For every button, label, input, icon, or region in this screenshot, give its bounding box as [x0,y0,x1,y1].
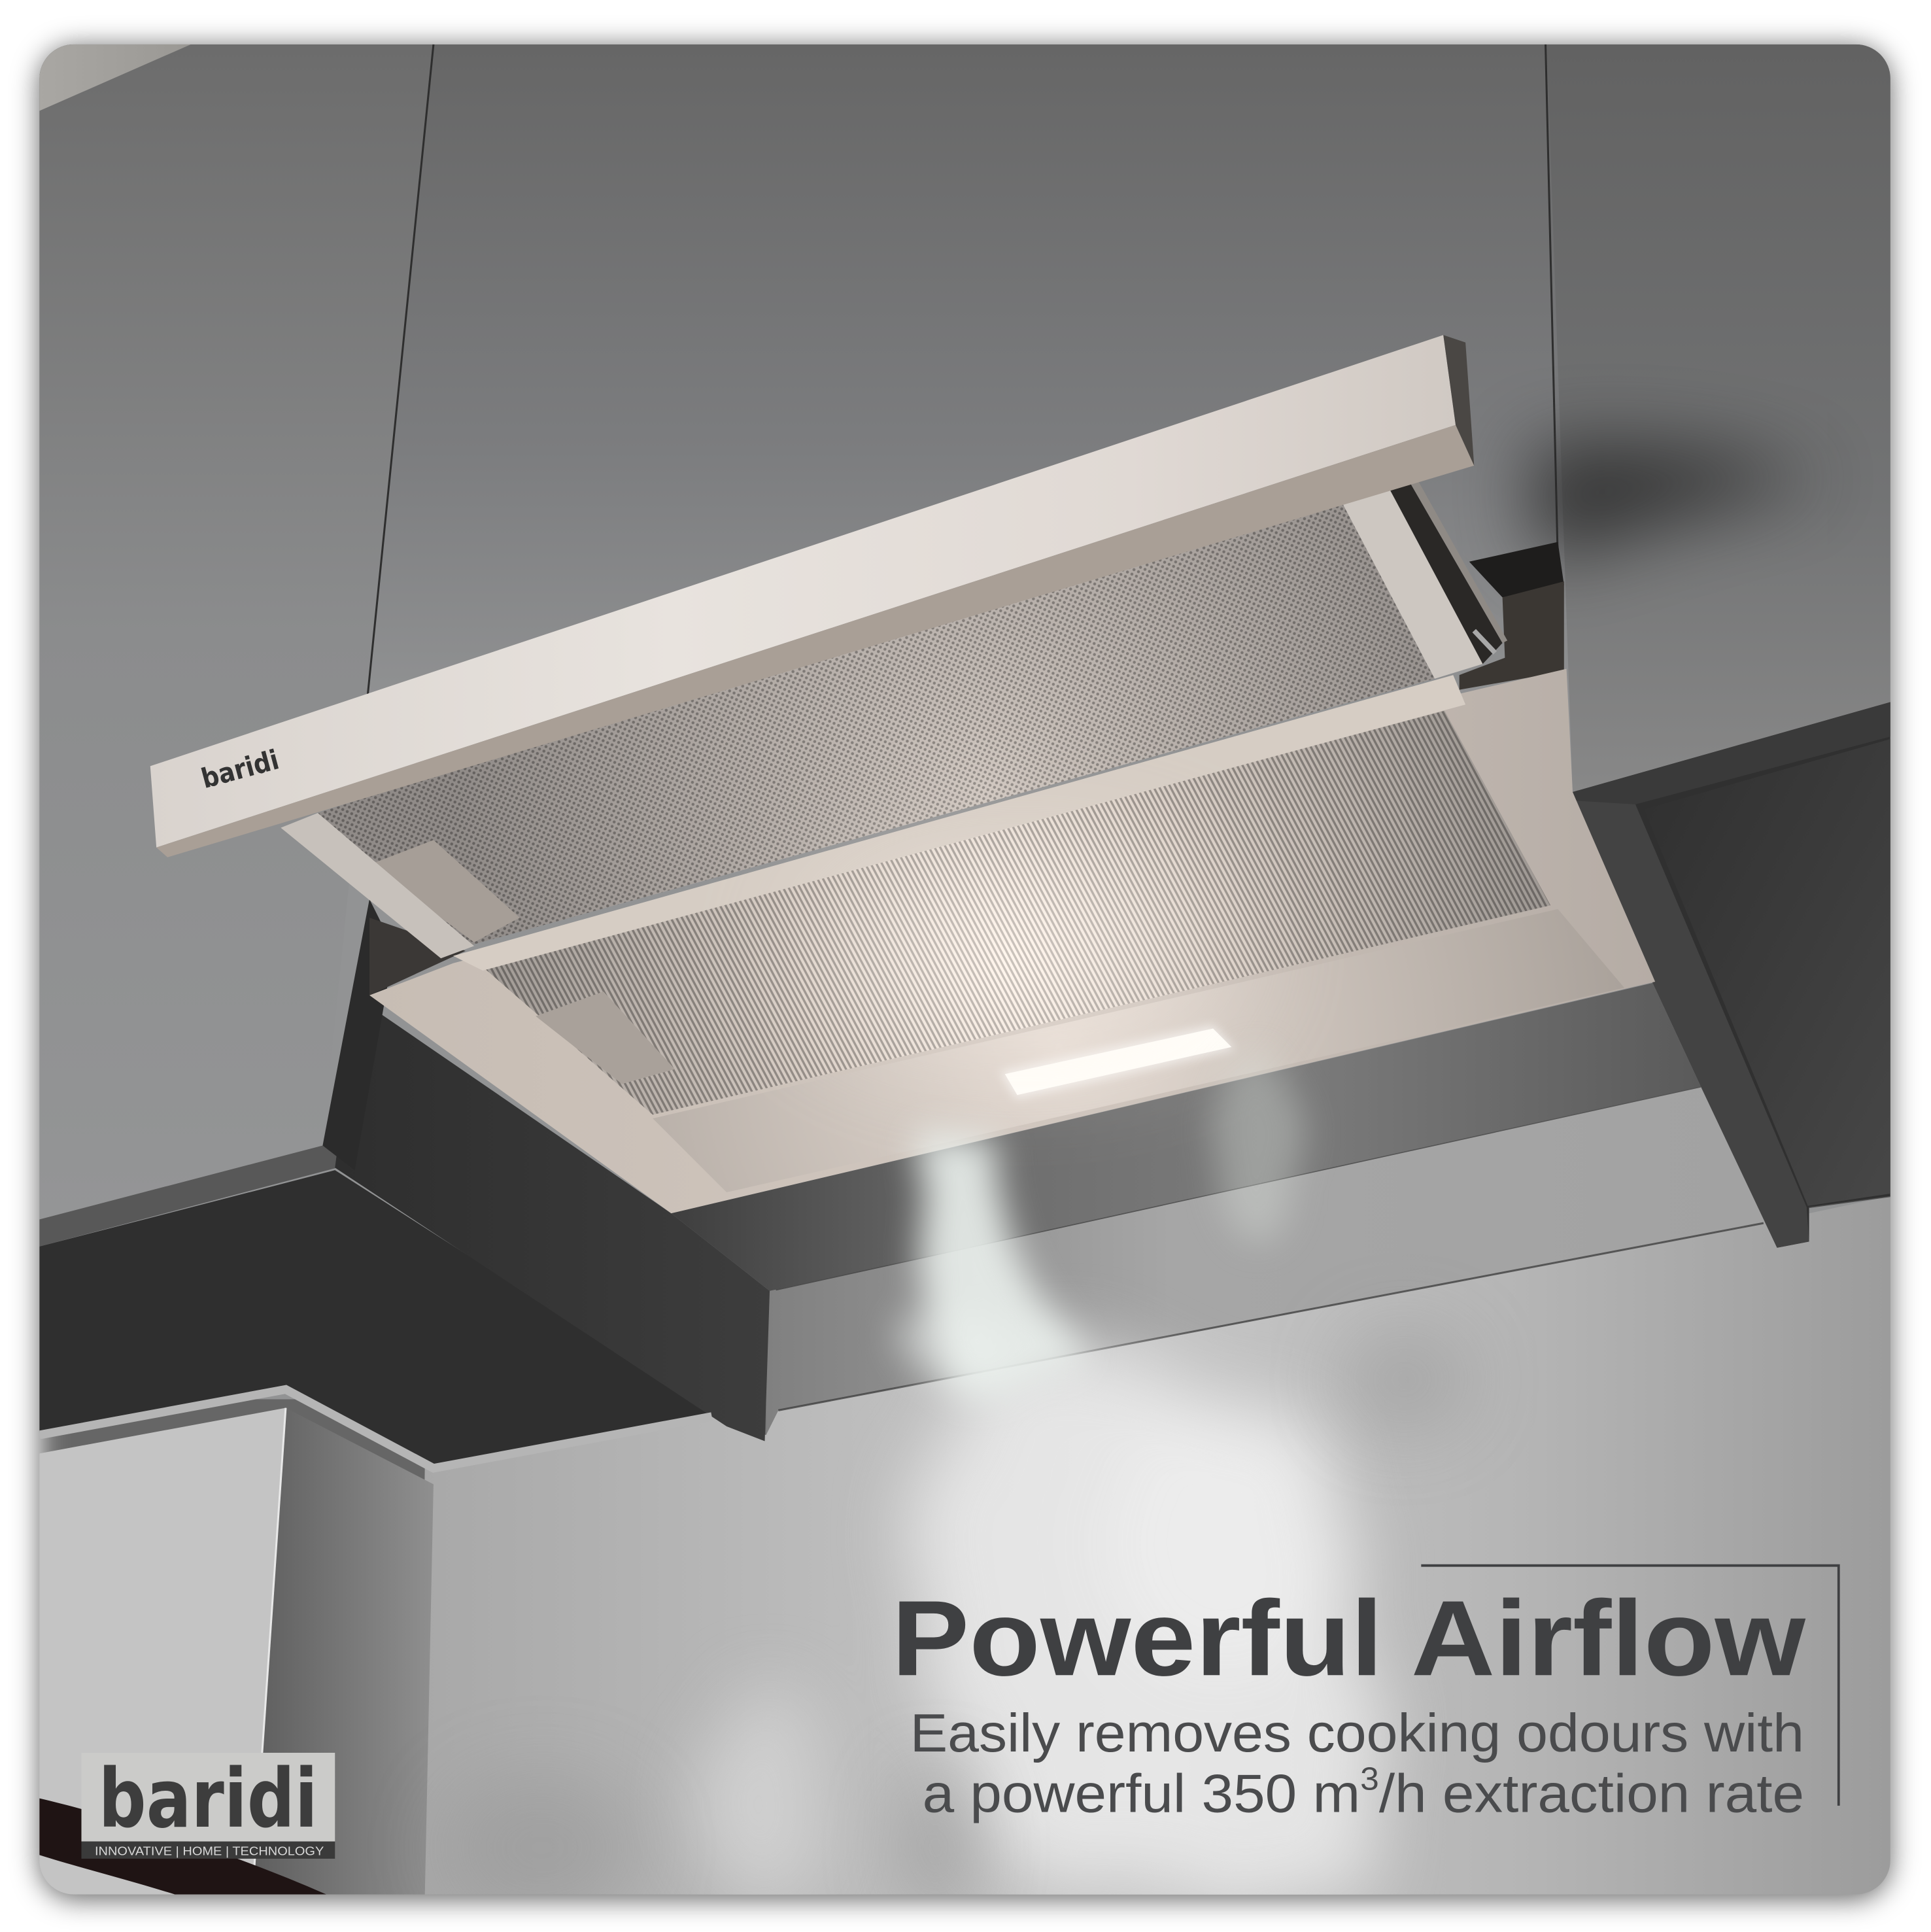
front slat [150,335,1474,857]
filter frame bar [453,675,1465,971]
light haze [813,862,1231,1035]
brand logo badge [81,1752,335,1859]
telescopic slider rail [1383,473,1507,664]
hood underside steel [671,983,1701,1291]
lower grease filter [483,711,1550,1114]
rising smoke: lower plume [702,1343,1379,1922]
description text: /h extraction rate [1379,1763,1804,1823]
upper grease filter [318,491,1435,946]
hood housing [369,669,1655,1213]
upper cabinets [39,44,1890,1399]
logo wordmark: baridi [99,1752,318,1846]
upper filter frames [281,477,1482,958]
callout corner bracket [1421,1566,1839,1806]
rising smoke: upper column [893,1053,1299,1404]
lower-left cabinets [39,1408,434,1895]
description text: Easily removes cooking odours with [910,1702,1804,1763]
left dark beam [39,899,770,1468]
LED light [1000,1025,1235,1099]
backsplash band [766,1086,1779,1435]
description text: a powerful 350 m [923,1763,1338,1823]
wall shade patches [443,1330,1465,1922]
title: Powerful Airflow [892,1578,1806,1698]
description text [910,1702,1804,1823]
extractor hood [150,335,1655,1213]
dark recess behind hood [1460,542,1564,690]
description text: 3 [1360,1761,1379,1797]
lower wall [419,1196,1890,1895]
right dark cabinet [1573,702,1890,1248]
trim lines [776,1086,1890,1410]
logo tagline: INNOVATIVE | HOME | TECHNOLOGY [95,1844,324,1857]
slat logo: baridi [198,744,282,795]
